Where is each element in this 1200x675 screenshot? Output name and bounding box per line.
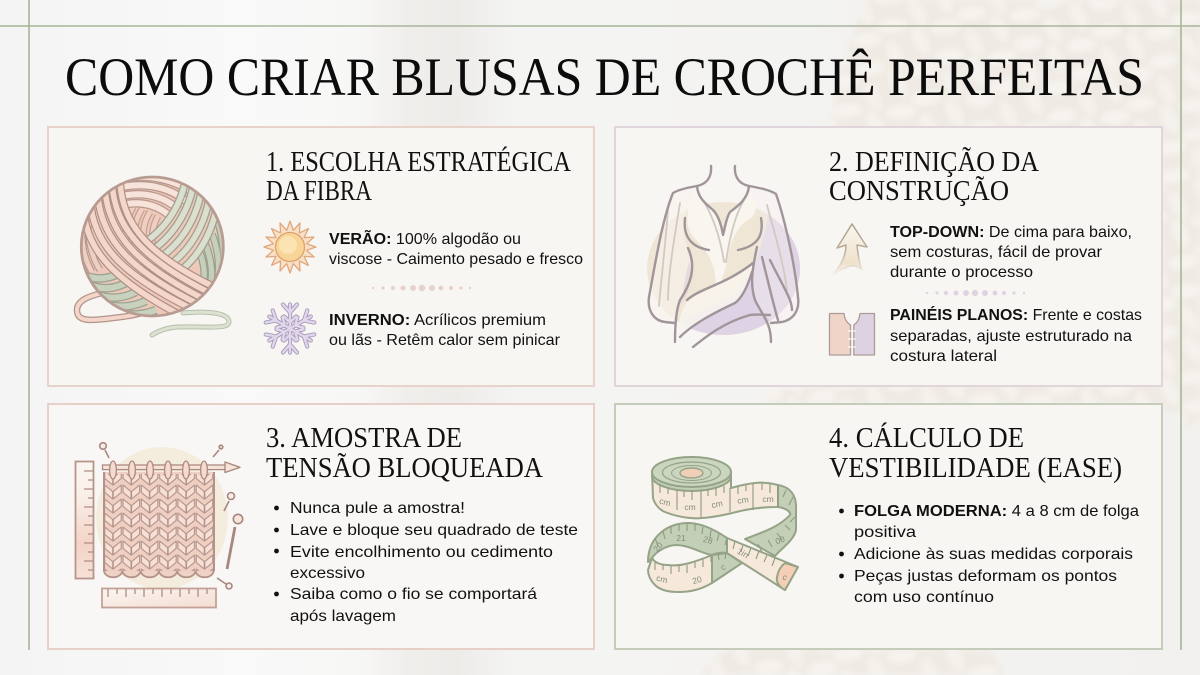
icon: measuring tape: cm xyxy=(762,494,774,504)
icon: measuring tape: 1in xyxy=(736,546,751,560)
text: top-down: sem costuras, fácil de provar xyxy=(890,244,1103,261)
bullet list: Peças justas deformam os pontos xyxy=(854,568,1117,585)
text: top-down: durante o processo xyxy=(890,264,1033,281)
text: painéis planos xyxy=(890,305,1142,365)
text: inverno xyxy=(329,312,561,349)
heading: 3. AMOSTRA DE xyxy=(266,423,462,454)
icon: measuring tape: cm xyxy=(737,494,749,506)
heading: DA FIBRA xyxy=(266,176,373,207)
bullet list xyxy=(274,500,578,625)
icon: blouse xyxy=(647,166,805,347)
icon: flat panels xyxy=(830,314,874,355)
text: painéis planos: PAINÉIS PLANOS: Frente e costas xyxy=(890,305,1142,324)
heading xyxy=(266,423,544,484)
bullet list: FOLGA MODERNA: 4 a 8 cm de folga xyxy=(854,503,1139,520)
heading: CONSTRUÇÃO xyxy=(829,176,1009,207)
icon: measuring tape: c xyxy=(781,572,789,583)
icon: measuring tape: cm xyxy=(710,498,724,510)
panel: 4 vestibilidade xyxy=(615,404,1162,649)
icon: measuring tape: cm xyxy=(684,502,696,512)
heading: 4. CÁLCULO DE xyxy=(829,423,1024,454)
icon: measuring tape: cm xyxy=(658,496,672,508)
bullet list: com uso contínuo xyxy=(854,589,994,606)
text: inverno: INVERNO: Acrílicos premium xyxy=(329,312,546,329)
panel: 3 amostra xyxy=(48,404,594,649)
icon: measuring tape: 21 xyxy=(676,533,686,543)
icon: up arrow xyxy=(831,224,867,276)
icon: ball of yarn xyxy=(77,172,229,335)
icon: swatch with rulers and pins xyxy=(76,443,243,608)
icon: snowflake xyxy=(266,304,314,352)
heading: VESTIBILIDADE (EASE) xyxy=(829,453,1122,484)
bullet list: Adicione às suas medidas corporais xyxy=(854,546,1133,563)
bullet list: Lave e bloque seu quadrado de teste xyxy=(290,522,578,539)
icon: sun xyxy=(264,221,316,273)
icon: measuring tape: cm xyxy=(655,573,669,585)
text: verão xyxy=(329,228,583,268)
heading: 2. DEFINIÇÃO DA xyxy=(829,147,1040,178)
heading xyxy=(829,423,1122,484)
panel: 2 construção xyxy=(615,127,1162,386)
text: top-down xyxy=(890,224,1132,281)
icon: measuring tape: 20 xyxy=(691,574,703,586)
dotted divider xyxy=(372,285,471,291)
bullet list: excessivo xyxy=(290,565,365,582)
icon: measuring tape: 28 xyxy=(702,534,714,546)
heading xyxy=(829,147,1040,207)
heading xyxy=(266,147,572,207)
bullet list: Nunca pule a amostra! xyxy=(290,500,465,517)
heading: TENSÃO BLOQUEADA xyxy=(266,453,544,484)
text: inverno: ou lãs - Retêm calor sem pinicar xyxy=(329,332,561,349)
text: top-down: TOP-DOWN: De cima para baixo, xyxy=(890,224,1132,241)
text: painéis planos: separadas, ajuste estruturado na xyxy=(890,328,1132,345)
text: verão: viscose - Caimento pesado e fresco xyxy=(329,251,583,268)
icon: measuring tape: c xyxy=(719,561,728,572)
bullet list: positiva xyxy=(854,524,916,541)
heading: 1. ESCOLHA ESTRATÉGICA xyxy=(266,147,572,178)
text: verão: VERÃO: 100% algodão ou xyxy=(329,228,521,248)
bullet list xyxy=(839,503,1139,606)
icon: measuring tape: 20 xyxy=(651,540,665,554)
bullet list: Saiba como o fio se comportará xyxy=(290,586,537,603)
bullet list: Evite encolhimento ou cedimento xyxy=(290,544,553,561)
dotted divider xyxy=(926,290,1025,296)
panel: 1 fibra xyxy=(48,127,594,386)
text: painéis planos: costura lateral xyxy=(890,348,997,365)
bullet list: após lavagem xyxy=(290,608,396,625)
icon: measuring tape xyxy=(648,457,798,592)
icon: measuring tape: 00 xyxy=(774,534,786,546)
